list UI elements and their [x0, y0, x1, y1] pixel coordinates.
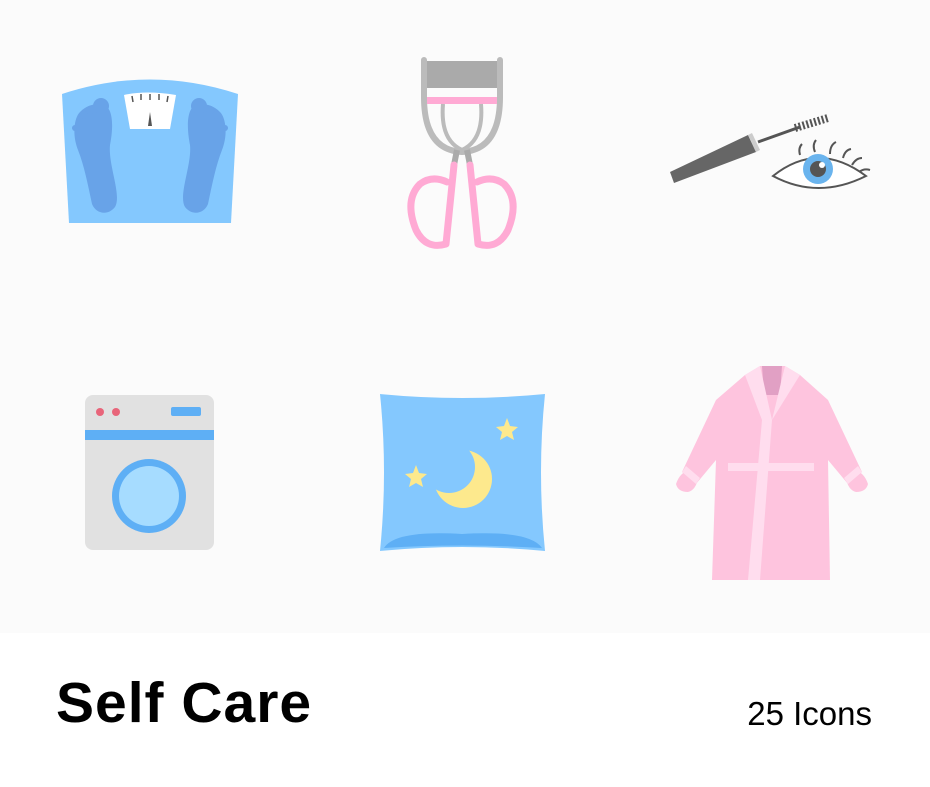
- icon: bathrobe: [676, 366, 868, 580]
- icon: pillow with moon: [380, 394, 545, 551]
- icon: bathroom scale: [62, 80, 238, 223]
- icon: mascara and eye: [670, 118, 870, 188]
- icon count: 25 Icons: [747, 695, 872, 732]
- icon: eyelash curler: [411, 60, 513, 245]
- title: Self Care: [56, 671, 312, 735]
- icon: washing machine: [85, 395, 214, 550]
